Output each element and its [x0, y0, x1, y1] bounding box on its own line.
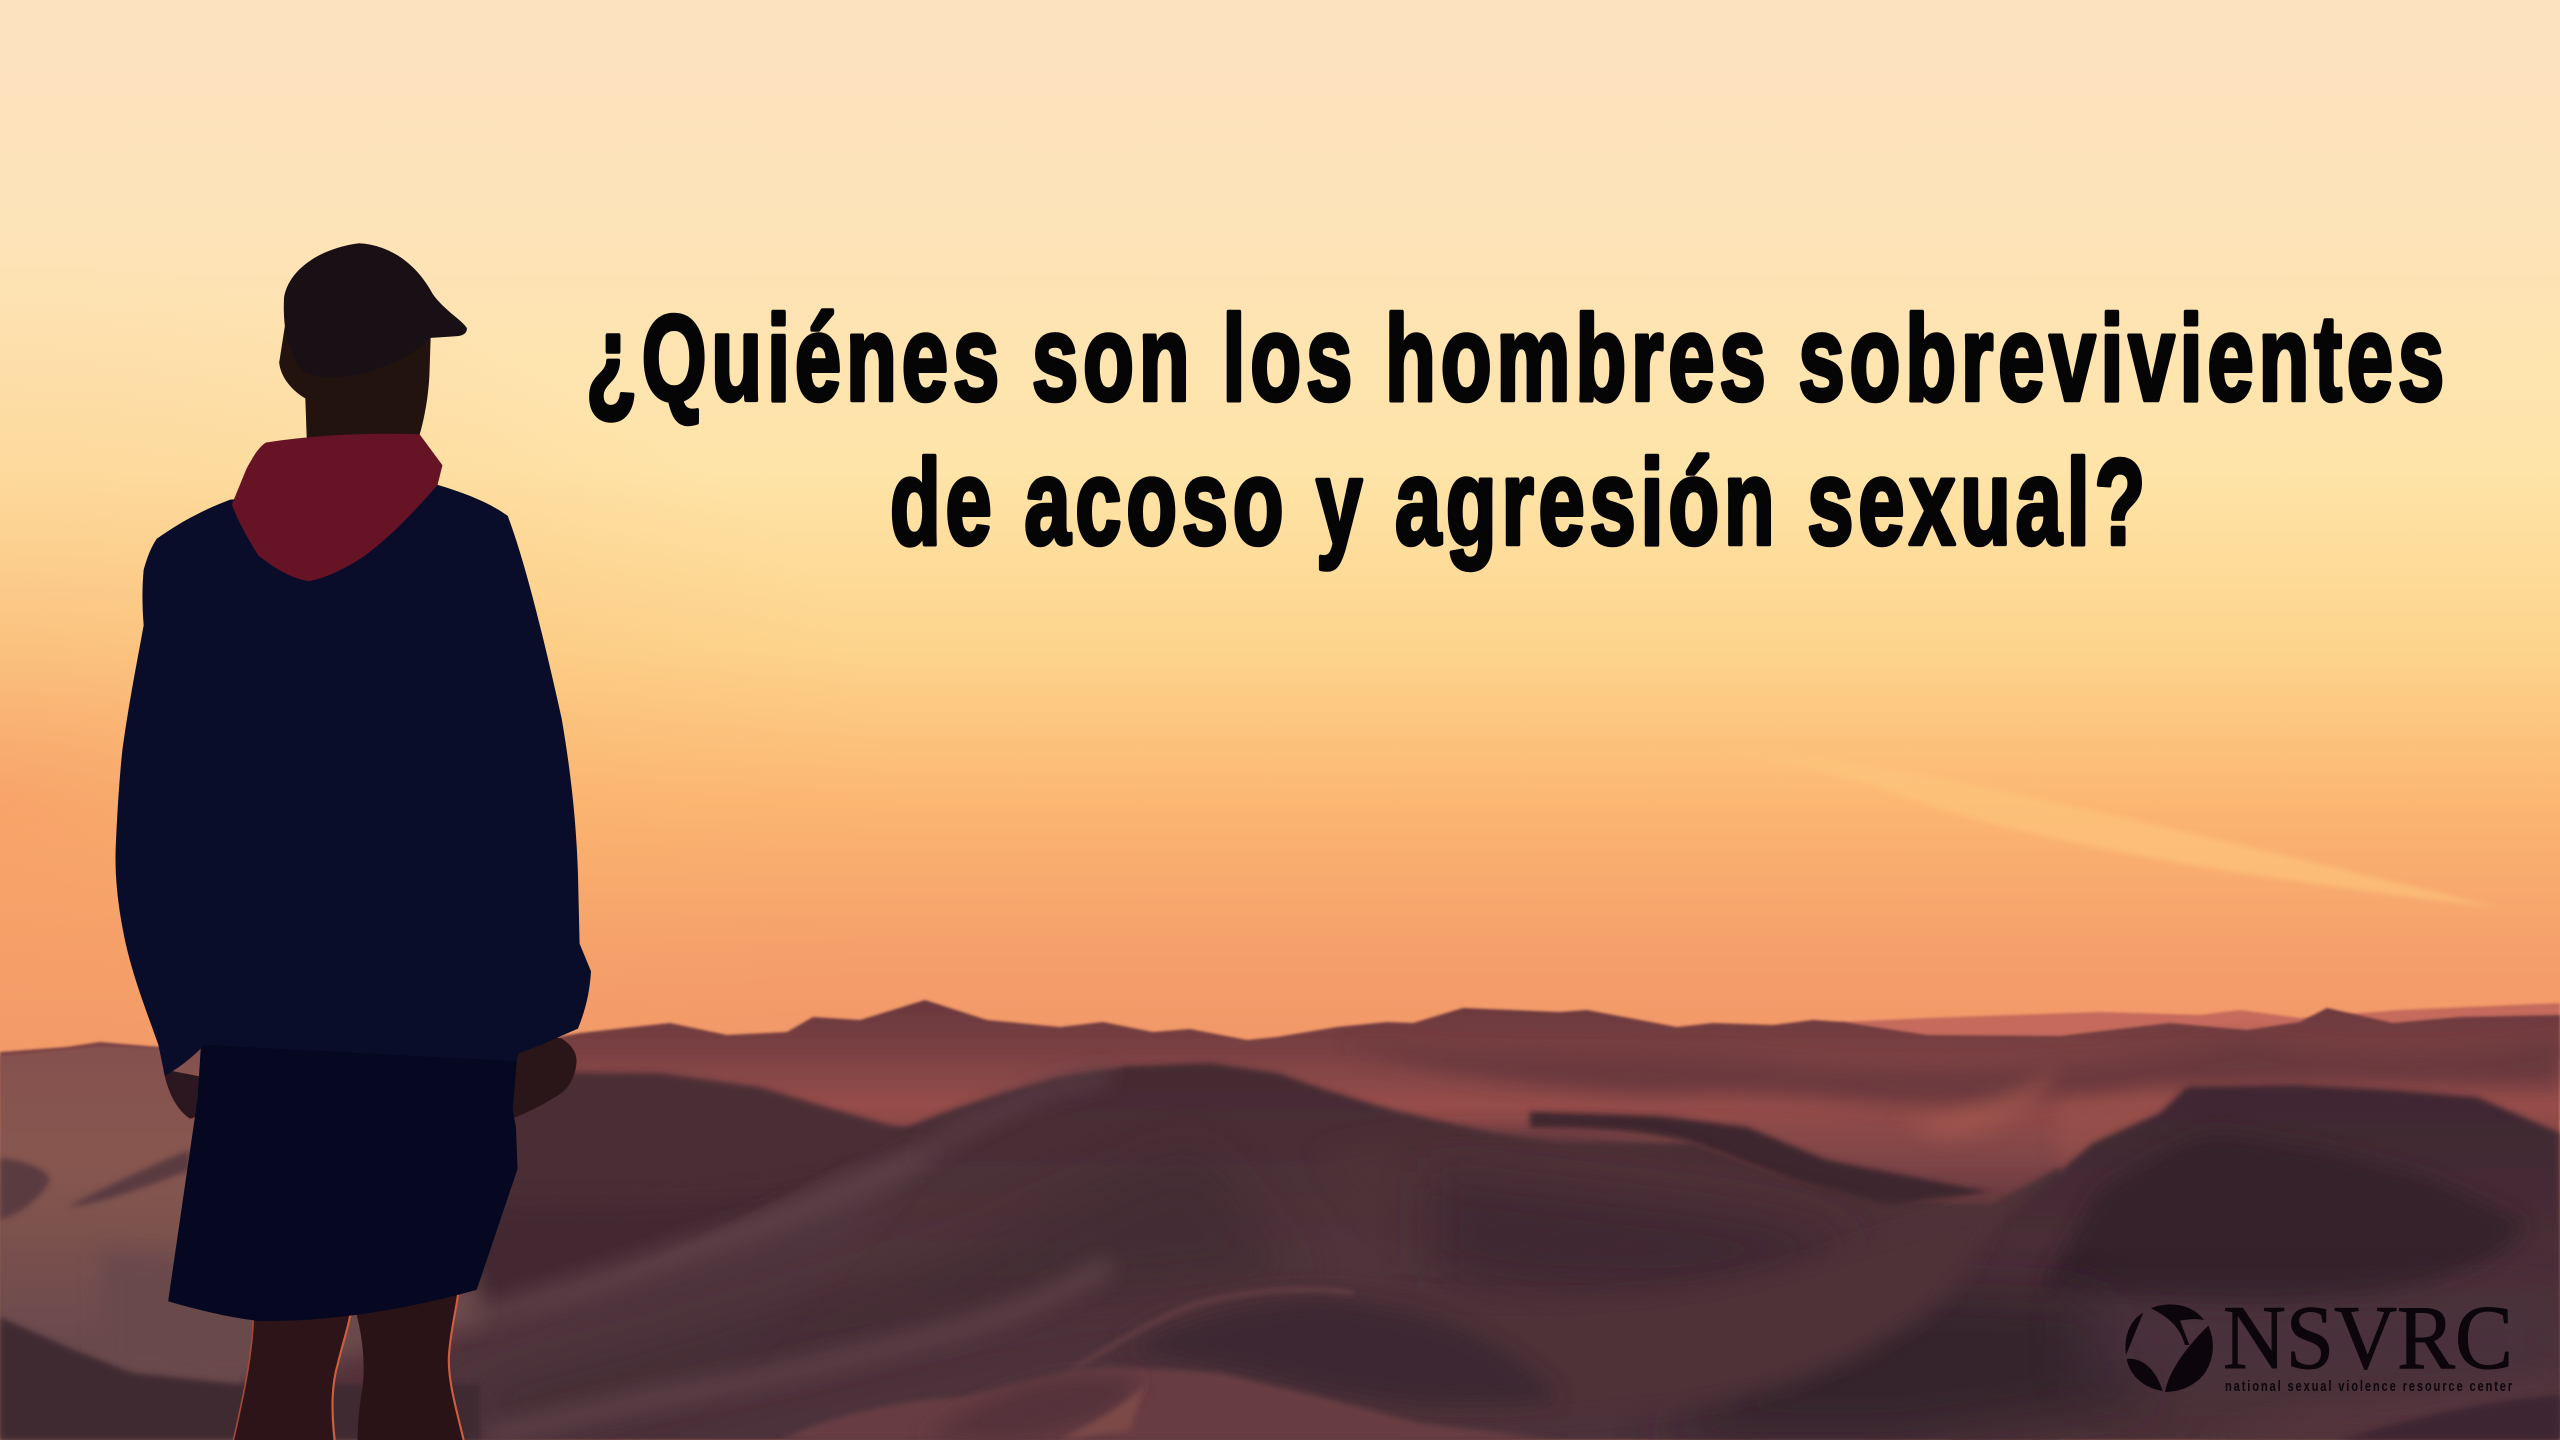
left hump — [0, 1158, 50, 1220]
hollow shadow — [1130, 1300, 1560, 1405]
distant haze ridge — [1800, 1003, 2560, 1060]
lit dune edge — [1073, 1289, 1353, 1368]
sky — [0, 0, 2560, 1120]
far ridge — [0, 1000, 2560, 1440]
valley dark — [1650, 1290, 2150, 1440]
lit sand right — [2060, 1085, 2180, 1165]
left leg faint rim — [233, 1309, 253, 1440]
valley shade — [480, 1150, 1300, 1436]
main dune — [460, 1063, 2060, 1440]
jacket — [116, 485, 591, 1076]
left dune beyond man — [460, 1072, 1000, 1330]
foreground lighter slope — [290, 1157, 920, 1440]
far ridge lit streak — [1900, 1070, 2060, 1138]
bottom left shadow — [0, 1317, 480, 1440]
leg rim light — [333, 1290, 464, 1440]
logo wordmark: NSVRC — [2223, 1287, 2513, 1388]
red hood — [232, 434, 442, 581]
bottom right shadow — [2340, 1395, 2560, 1440]
title — [586, 290, 2449, 570]
NSVRC logo — [2125, 1287, 2514, 1395]
left leg — [233, 1303, 353, 1440]
logo emblem — [2125, 1304, 2213, 1392]
man silhouette — [116, 243, 591, 1440]
shorts — [168, 996, 522, 1321]
neck and head — [279, 310, 431, 444]
far ridge shadows — [1340, 1040, 2560, 1110]
lit dune inner shadow — [920, 1376, 1140, 1440]
cap — [284, 243, 467, 377]
sky warm tint on left — [0, 0, 1400, 1120]
wispy cloud — [1715, 745, 2500, 908]
logo zone tint — [2080, 1300, 2560, 1380]
left far dunes behind man — [0, 1046, 240, 1440]
right leg — [353, 1290, 464, 1440]
left dune lower shade — [460, 1170, 880, 1320]
left hand — [163, 1069, 206, 1119]
right dune dark hollow — [2040, 1133, 2527, 1305]
right hand — [509, 1038, 577, 1118]
left diagonal shadow — [67, 1150, 190, 1207]
ridge highlight main flank — [920, 1075, 1110, 1157]
ridge highlight B — [487, 1265, 1110, 1437]
bottom right slope — [2200, 1370, 2560, 1440]
foreground hollow dune — [1120, 1204, 1992, 1420]
right dune — [1950, 1085, 2560, 1440]
dark dome mid foreground — [1430, 1170, 1860, 1298]
bottom lit dune — [780, 1367, 1560, 1440]
upper dune shoulder — [1320, 1131, 1860, 1302]
shadow band on ridge — [1530, 1112, 1990, 1205]
lit sand streak — [1060, 1385, 1145, 1440]
ridge highlight A — [467, 1157, 920, 1320]
sand behind legs — [100, 1250, 480, 1385]
